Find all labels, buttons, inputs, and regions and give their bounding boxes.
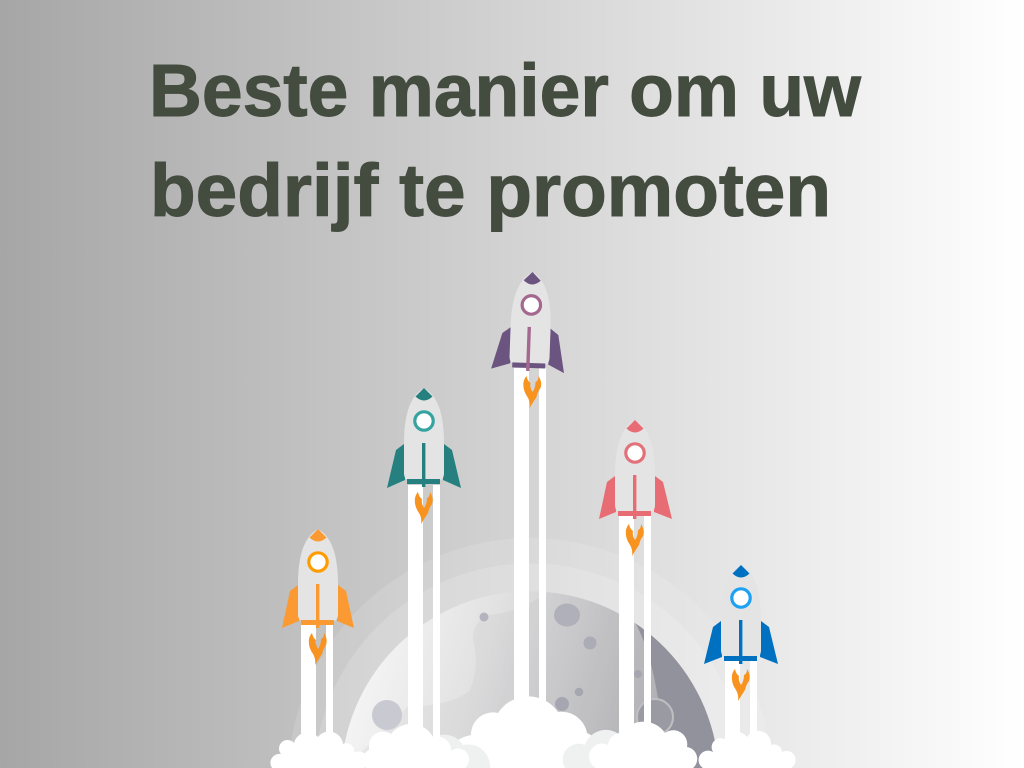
title: bedrijf te promoten xyxy=(150,149,831,232)
rocket: red xyxy=(599,420,672,556)
cloud: purple rocket xyxy=(458,696,600,768)
rocket: purple xyxy=(490,271,567,409)
rocket: blue xyxy=(704,565,778,701)
moon with halo rings xyxy=(318,564,715,768)
rocket: green xyxy=(387,388,461,524)
cloud: red rocket xyxy=(589,722,697,768)
rocket: orange xyxy=(282,529,354,665)
exhaust trails xyxy=(301,368,757,750)
cloud: green rocket xyxy=(363,724,469,768)
cloud: blue rocket xyxy=(699,731,796,768)
title xyxy=(149,49,861,232)
pale clouds behind xyxy=(440,730,630,768)
title: Beste manier om uw xyxy=(149,49,861,132)
cloud: orange rocket xyxy=(270,732,368,768)
